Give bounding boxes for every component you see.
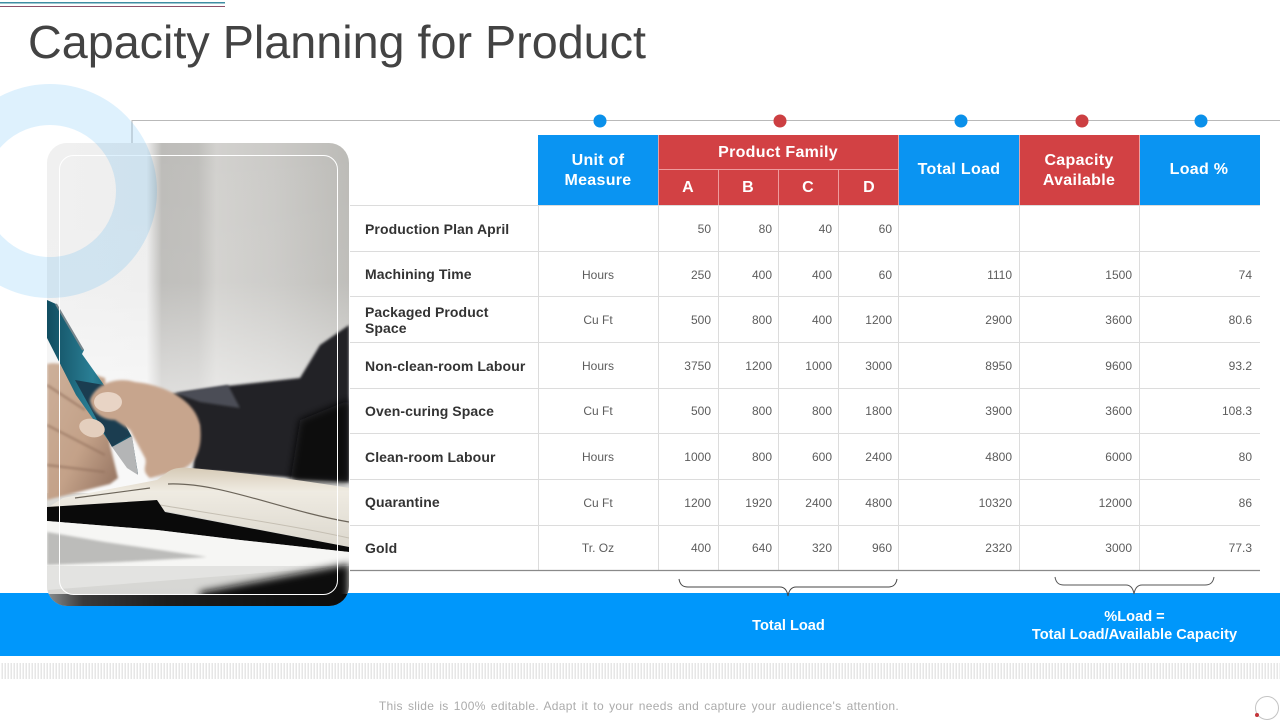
- row: oven-curing space: Oven-curing Space: [365, 403, 494, 419]
- page marker icon: [1255, 696, 1278, 720]
- row: packaged product space: 500: [691, 313, 711, 327]
- header: capacity available: [1020, 135, 1140, 206]
- row: machining time: 1500: [1105, 268, 1132, 282]
- striped divider: [0, 663, 1280, 679]
- row: quarantine: Quarantine: [365, 494, 440, 510]
- header: unit of measure: Measure: [564, 172, 632, 189]
- row: packaged product space: Cu Ft: [583, 313, 613, 327]
- row: oven-curing space: 800: [812, 404, 832, 418]
- row: oven-curing space: 500: [691, 404, 711, 418]
- row: quarantine: [365, 494, 1252, 510]
- row: packaged product space: 400: [812, 313, 832, 327]
- row: packaged product space: 3600: [1105, 313, 1132, 327]
- title: Capacity Planning for Product: [28, 16, 646, 68]
- row: gold: 640: [752, 541, 772, 555]
- row: clean-room labour: 600: [812, 450, 832, 464]
- row: clean-room labour: [365, 449, 1252, 465]
- row: gold: Gold: [365, 540, 397, 556]
- row: non-clean-room labour: 93.2: [1229, 359, 1252, 373]
- row: clean-room labour: 80: [1239, 450, 1252, 464]
- footer note: This slide is 100% editable. Adapt it to your needs and capture your audience's attention.: [379, 699, 899, 713]
- row: quarantine: 1920: [745, 496, 772, 510]
- row: machining time: 1110: [987, 268, 1012, 282]
- row: non-clean-room labour: 3750: [684, 359, 711, 373]
- row: gold: 400: [691, 541, 711, 555]
- header: load percent: [1140, 135, 1260, 206]
- row: clean-room labour: 800: [752, 450, 772, 464]
- row: machining time: 400: [812, 268, 832, 282]
- photo inner outline: [60, 156, 338, 594]
- row: oven-curing space: 3600: [1105, 404, 1132, 418]
- brace: percent load: [1055, 577, 1214, 594]
- header: product family: Product Family: [718, 144, 838, 161]
- row: production plan april: [365, 221, 892, 237]
- blue footer band: [0, 593, 1280, 656]
- brace: total load: [679, 579, 897, 596]
- row: non-clean-room labour: Non-clean-room Labour: [365, 358, 526, 374]
- row: production plan april: 40: [819, 222, 832, 236]
- row: oven-curing space: 108.3: [1222, 404, 1252, 418]
- row: quarantine: 2400: [805, 496, 832, 510]
- band label: percent load formula: %Load =: [1104, 609, 1165, 625]
- band label: percent load formula: Total Load/Available Capacity: [1032, 627, 1238, 643]
- row: machining time: 60: [879, 268, 892, 282]
- row: production plan april: 60: [879, 222, 892, 236]
- row: production plan april: 50: [698, 222, 711, 236]
- top accent lines: [0, 2, 225, 7]
- row: non-clean-room labour: 9600: [1105, 359, 1132, 373]
- row: gold: [365, 540, 1252, 556]
- row: clean-room labour: 1000: [684, 450, 711, 464]
- row: packaged product space: 80.6: [1229, 313, 1252, 327]
- table header: [538, 135, 1260, 206]
- row: non-clean-room labour: 1000: [805, 359, 832, 373]
- row: gold: 320: [812, 541, 832, 555]
- row: packaged product space: 2900: [985, 313, 1012, 327]
- row: packaged product space: Space: [365, 320, 407, 336]
- row: quarantine: 10320: [979, 496, 1012, 510]
- header: total load: Total Load: [918, 161, 1000, 178]
- band label: total load: Total Load: [752, 618, 825, 634]
- header: capacity available: Available: [1043, 172, 1115, 189]
- connector line with header dots: [132, 114, 1280, 143]
- header: product family: [658, 135, 898, 206]
- header: unit of measure: [538, 135, 658, 206]
- row: oven-curing space: [365, 403, 1252, 419]
- decorative ring: [0, 104, 136, 278]
- row: packaged product space: Packaged Product: [365, 304, 489, 320]
- row: gold: 2320: [985, 541, 1012, 555]
- header: product family: C: [802, 179, 814, 196]
- header: product family: B: [742, 179, 754, 196]
- row: oven-curing space: 1800: [865, 404, 892, 418]
- row: packaged product space: [365, 304, 1252, 336]
- row: machining time: [365, 266, 1252, 282]
- band label: percent load formula: [1032, 609, 1238, 643]
- row: non-clean-room labour: 1200: [745, 359, 772, 373]
- row: gold: 77.3: [1229, 541, 1252, 555]
- row: oven-curing space: Cu Ft: [583, 404, 613, 418]
- row: clean-room labour: Clean-room Labour: [365, 449, 496, 465]
- row: quarantine: Cu Ft: [583, 496, 613, 510]
- row: quarantine: 1200: [684, 496, 711, 510]
- row: clean-room labour: 4800: [985, 450, 1012, 464]
- row: oven-curing space: 800: [752, 404, 772, 418]
- header: load percent: Load %: [1170, 161, 1228, 178]
- row: oven-curing space: 3900: [985, 404, 1012, 418]
- row: non-clean-room labour: [365, 358, 1252, 374]
- row: non-clean-room labour: 8950: [985, 359, 1012, 373]
- header: capacity available: Capacity: [1044, 152, 1114, 169]
- row: machining time: Machining Time: [365, 266, 472, 282]
- row: production plan april: Production Plan April: [365, 221, 509, 237]
- row: non-clean-room labour: 3000: [865, 359, 892, 373]
- row: gold: Tr. Oz: [582, 541, 614, 555]
- row: gold: 3000: [1105, 541, 1132, 555]
- row: quarantine: 4800: [865, 496, 892, 510]
- row: machining time: 250: [691, 268, 711, 282]
- row: packaged product space: 1200: [865, 313, 892, 327]
- table body: [350, 206, 1260, 570]
- row: packaged product space: 800: [752, 313, 772, 327]
- row: machining time: 400: [752, 268, 772, 282]
- header: unit of measure: Unit of: [572, 152, 625, 169]
- row: non-clean-room labour: Hours: [582, 359, 614, 373]
- row: production plan april: 80: [759, 222, 772, 236]
- row: quarantine: 86: [1239, 496, 1252, 510]
- row: clean-room labour: Hours: [582, 450, 614, 464]
- header: total load: [899, 135, 1019, 206]
- row: machining time: Hours: [582, 268, 614, 282]
- row: gold: 960: [872, 541, 892, 555]
- row: quarantine: 12000: [1099, 496, 1132, 510]
- photo: hand writing in a notebook: [47, 143, 349, 606]
- header: product family: D: [863, 179, 875, 196]
- row: machining time: 74: [1239, 268, 1252, 282]
- row: clean-room labour: 6000: [1105, 450, 1132, 464]
- header: product family: A: [682, 179, 694, 196]
- row: clean-room labour: 2400: [865, 450, 892, 464]
